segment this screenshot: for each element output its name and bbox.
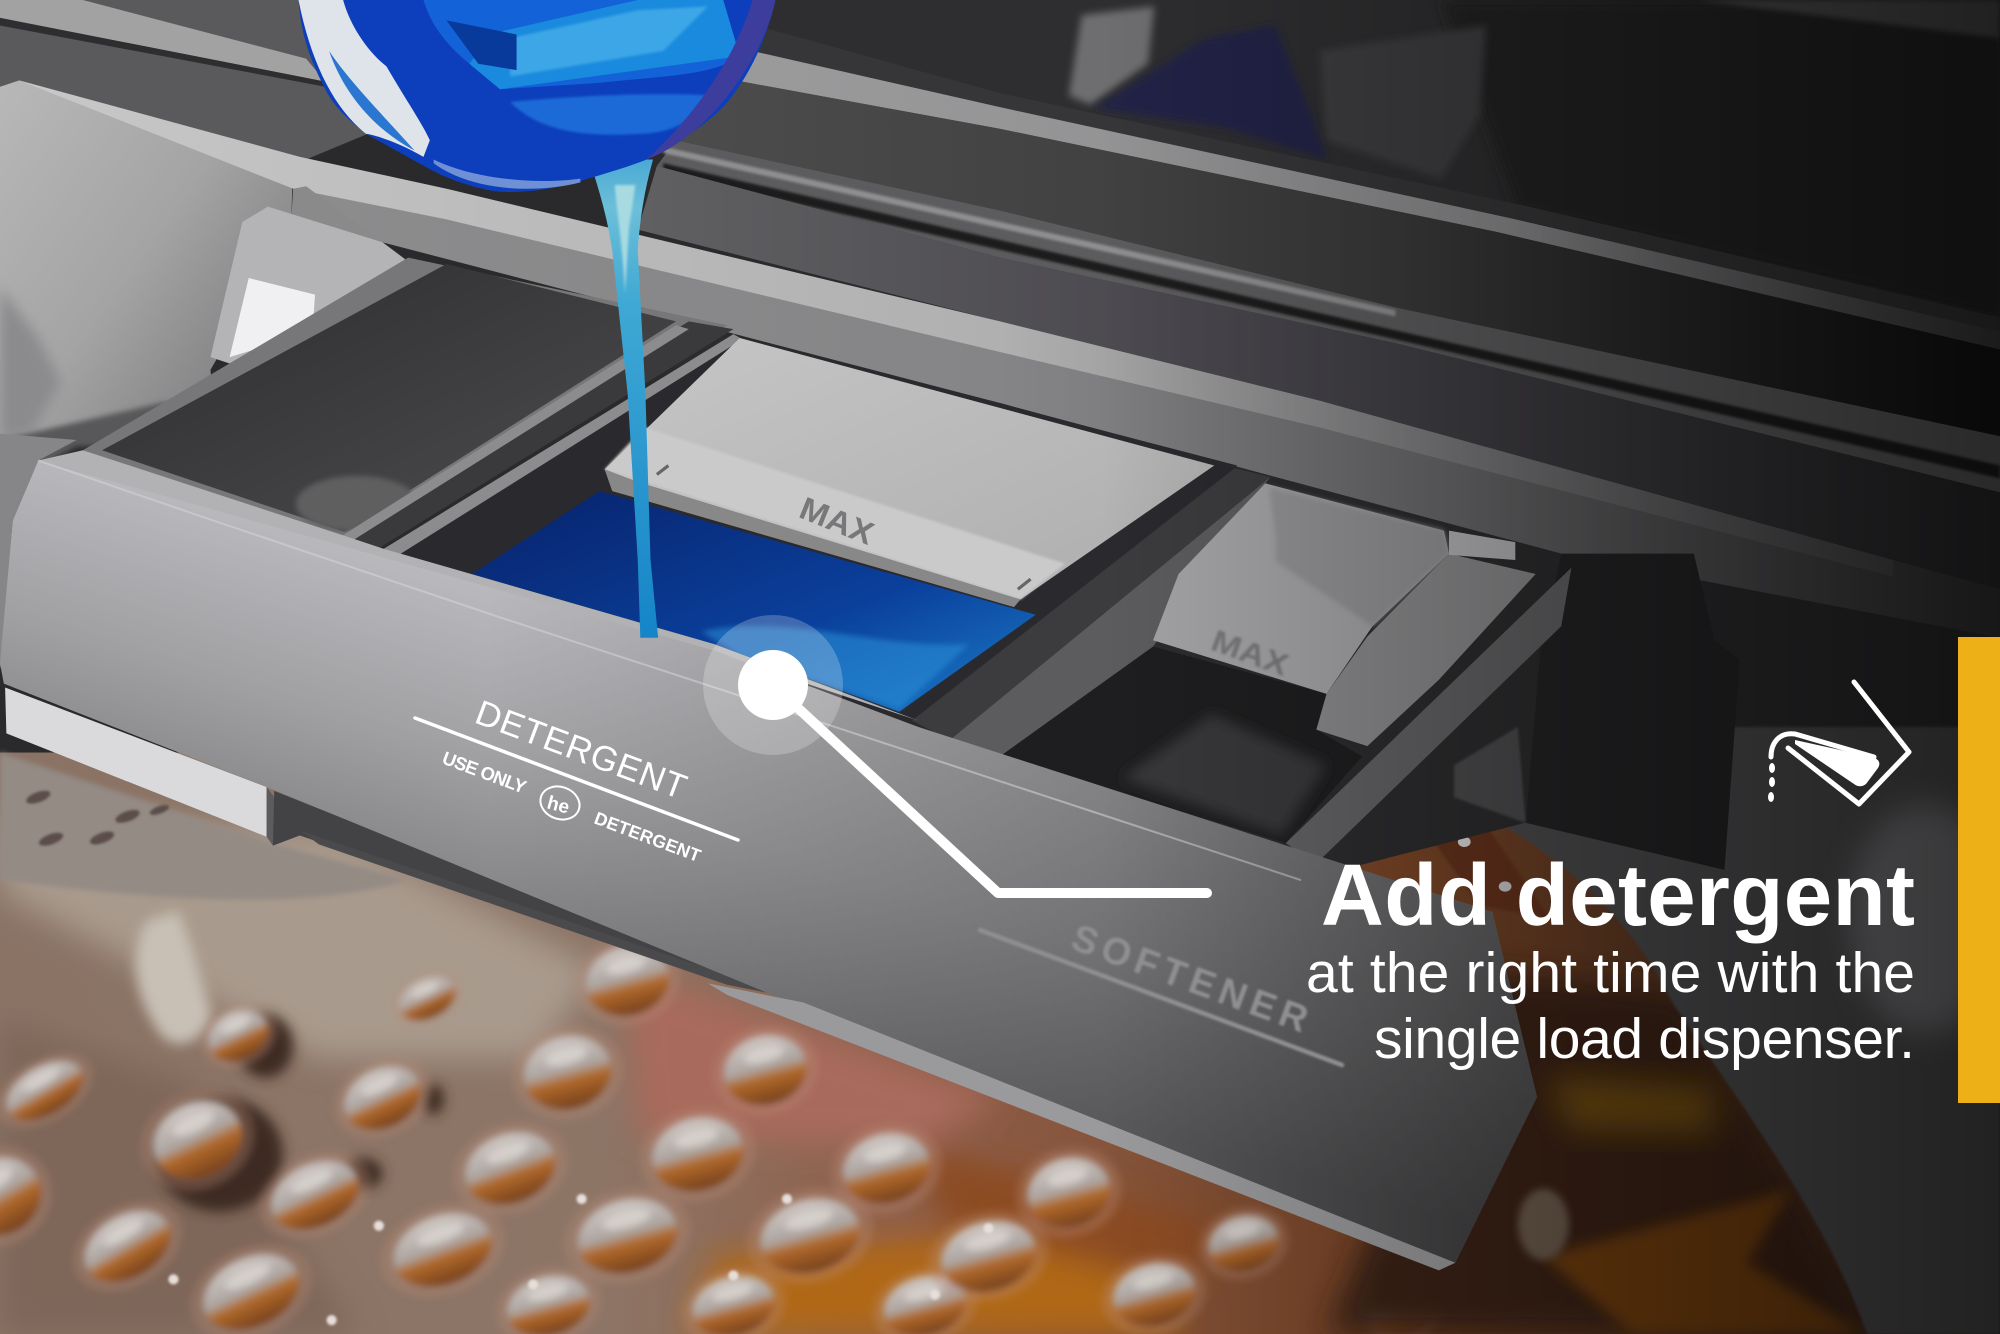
- softener max label: MAX: [1207, 624, 1293, 683]
- reddish gap with drum dots: [1416, 797, 1550, 918]
- lower swirl: [510, 94, 714, 135]
- stream highlight: [615, 185, 635, 293]
- washer tub rim at right: [1429, 727, 2000, 1334]
- drum shadow at right: [1327, 969, 1875, 1334]
- panel lettering: detergent: [415, 693, 738, 866]
- drum with dimples: [0, 753, 2000, 1334]
- heading: Add detergent: [1321, 847, 1915, 944]
- body text: single load dispenser.: [1374, 1007, 1915, 1071]
- shiny stripes: [657, 140, 2000, 492]
- marker halo: [703, 615, 843, 755]
- cup collar: [298, 0, 430, 157]
- dark blob: [446, 20, 517, 70]
- drawer underside: [273, 791, 816, 1008]
- reflected tag: [1094, 26, 1327, 159]
- collar tint: [329, 51, 415, 151]
- dark lid edge: [753, 28, 2000, 334]
- body text: at the right time with the: [1306, 941, 1915, 1005]
- upper-left metal deck: [0, 0, 383, 670]
- rail ridge: [19, 80, 1893, 577]
- flat dark band: [638, 166, 2000, 589]
- callout marker and leader: [703, 615, 1207, 893]
- drawer: middle compartment: [342, 321, 1237, 727]
- fill ticks: [657, 466, 1031, 589]
- drawer divider: [912, 468, 1270, 740]
- light lid band: [714, 51, 2000, 349]
- detergent stream: [589, 159, 658, 638]
- he logo: [536, 781, 584, 825]
- yellow accent bar: [1958, 637, 2000, 1103]
- leader line: [773, 685, 1207, 893]
- tub highlight: [1849, 804, 2000, 1033]
- top strip: [0, 0, 325, 82]
- light wedge beside end: [1454, 727, 1526, 823]
- drawer underside shadow: [300, 830, 797, 999]
- control window: [230, 278, 315, 357]
- softener insert: [1153, 483, 1449, 694]
- softener heading: SOFTENER: [1066, 917, 1313, 1041]
- drawer: left compartment: [83, 258, 727, 546]
- icon: pouring cup: [1768, 682, 1909, 804]
- detergent small: DETERGENT: [592, 808, 704, 866]
- softener flap: [1316, 554, 1536, 746]
- detergent pool: [472, 491, 1036, 712]
- panel rim highlight: [38, 460, 1301, 880]
- softener rule: [980, 930, 1342, 1065]
- liquid plane: [469, 0, 740, 89]
- bottom lip: [434, 159, 580, 189]
- drawer front panel: [0, 460, 1537, 1263]
- perforated band under drawer: [0, 753, 408, 900]
- reflected label left: [1069, 6, 1154, 105]
- softener tab: [1449, 531, 1515, 560]
- silver trim left: [5, 687, 300, 846]
- drawer lower edge: [708, 983, 1455, 1270]
- panel lettering: softener: [980, 917, 1342, 1065]
- reflected label right: [1320, 26, 1486, 179]
- dispenser rail: [19, 80, 2000, 638]
- detergent heading: DETERGENT: [470, 693, 692, 807]
- pale reflection: [510, 6, 708, 77]
- use only: USE ONLY: [440, 747, 530, 798]
- measuring cup: [298, 0, 776, 192]
- floor: [1000, 647, 1362, 843]
- housing right end: [1526, 554, 1740, 870]
- marker dot: [738, 650, 808, 720]
- max label: MAX: [795, 490, 879, 552]
- rail end cap: [291, 186, 383, 242]
- drawer: right compartment: [950, 477, 1571, 864]
- dark dimple shadows: [156, 1014, 444, 1212]
- deck edge behind panel: [0, 434, 77, 670]
- drawer rim top: [38, 450, 918, 721]
- panel shade: [0, 460, 1537, 1263]
- heading rule: [415, 718, 738, 840]
- top lid glass: [638, 0, 2000, 589]
- dark sponge band: [676, 77, 2000, 436]
- max fill insert: [605, 338, 1214, 599]
- he logo: he: [545, 793, 572, 819]
- body text: [1306, 941, 1915, 1071]
- left wall: [950, 477, 1270, 756]
- drawer back shadow: [408, 261, 1561, 874]
- right rim: [647, 0, 776, 159]
- cup inner: [423, 0, 740, 89]
- white fold highlight: [136, 911, 211, 1044]
- housing left bracket: [210, 207, 408, 364]
- right wall: [1286, 568, 1571, 864]
